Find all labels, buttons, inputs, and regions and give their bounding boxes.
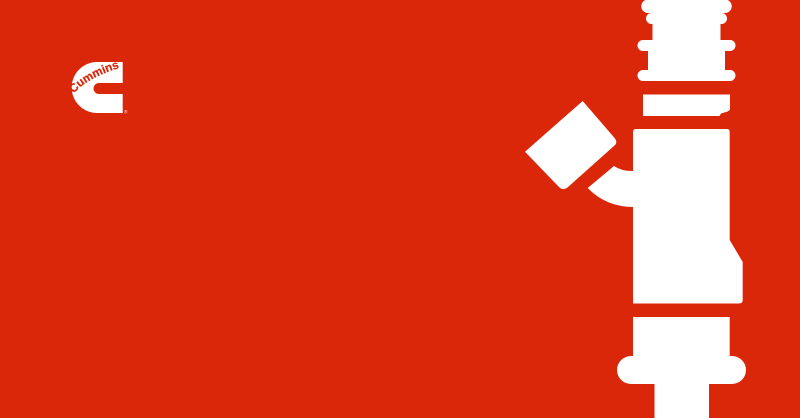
logo: Cummins: [72, 62, 128, 114]
angled connector block: [525, 101, 616, 189]
logo wordmark: Cummins: [72, 62, 119, 92]
injector main body: [633, 129, 743, 304]
illustration: fuel injector: [525, 0, 746, 418]
injector collar: [643, 94, 730, 116]
registered mark: ®: [124, 108, 128, 114]
injector lower section and nozzle: [617, 317, 746, 418]
curved elbow pipe: [588, 166, 634, 207]
injector top cap: [638, 0, 736, 81]
